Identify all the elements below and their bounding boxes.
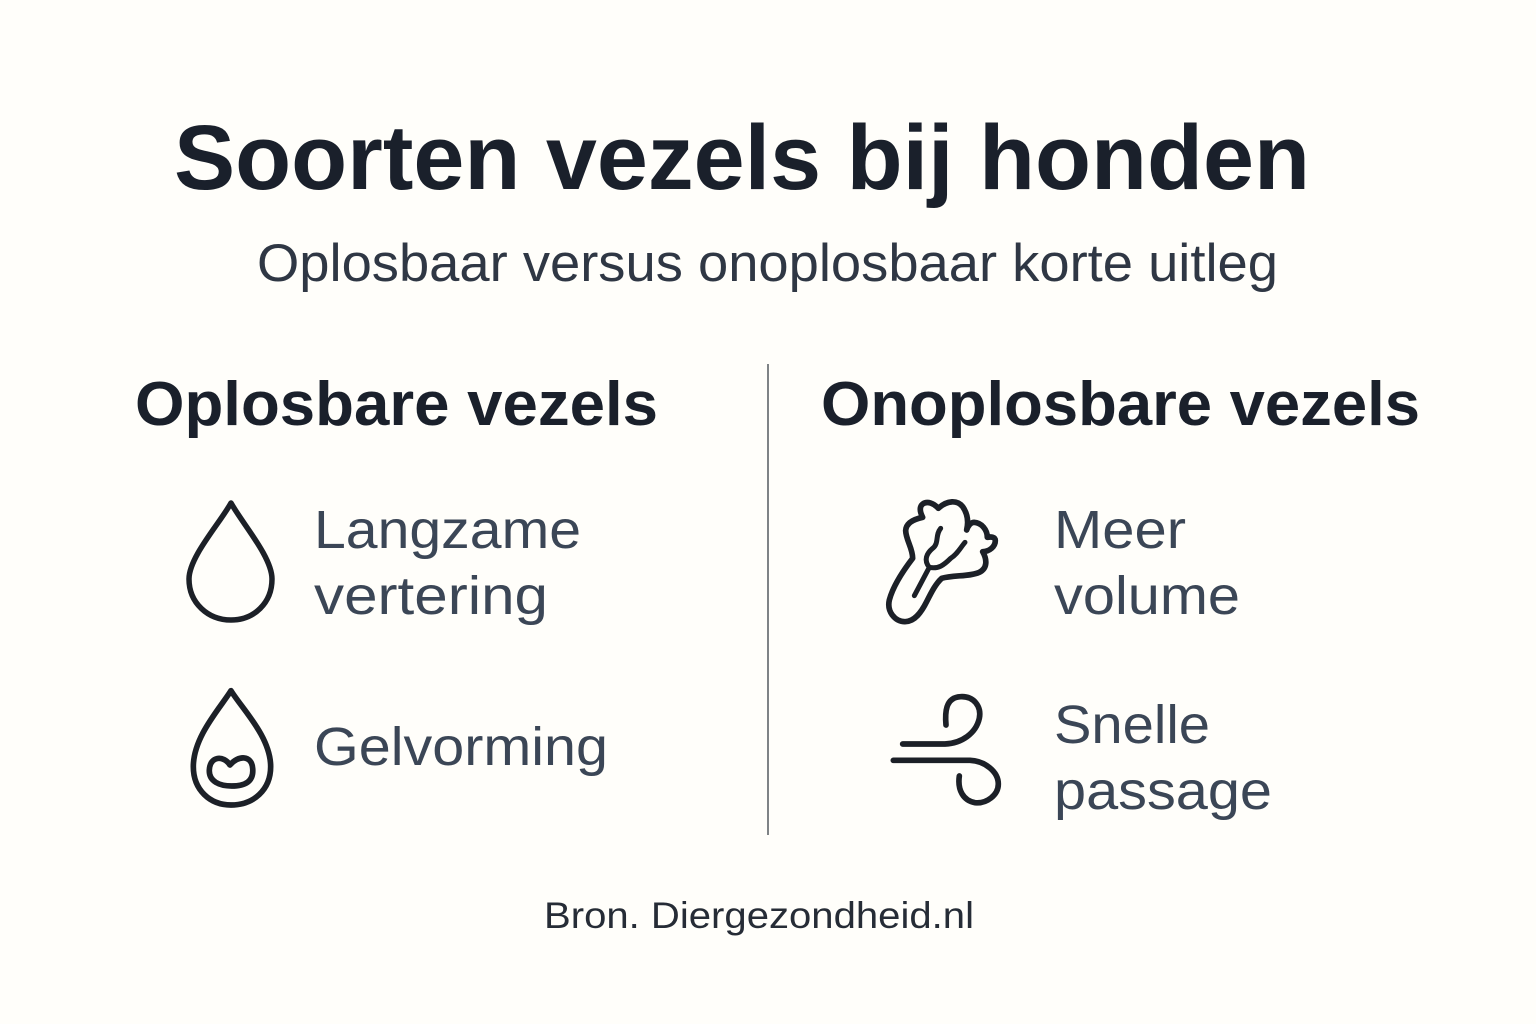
icon: water drop [189, 503, 272, 620]
text: meer volume [1054, 500, 1240, 626]
title: Soorten vezels bij honden [174, 107, 1310, 209]
text: snelle passage: Snelle [1054, 695, 1210, 755]
subtitle: Oplosbaar versus onoplosbaar korte uitleg [257, 234, 1278, 293]
heading: onoplosbare vezels: Onoplosbare vezels [821, 370, 1420, 439]
icon: drop with gel [193, 691, 271, 805]
heading: oplosbare vezels: Oplosbare vezels [135, 370, 658, 439]
icon: leafy vegetable [889, 502, 995, 622]
text: langzame vertering: vertering [314, 566, 548, 626]
text: langzame vertering [314, 500, 581, 626]
panel: oplosbare vezels [135, 370, 658, 805]
icon: wind [893, 697, 998, 803]
text: meer volume: Meer [1054, 500, 1186, 560]
text: meer volume: volume [1054, 566, 1240, 626]
center divider [767, 364, 769, 835]
text: gelvorming: Gelvorming [314, 717, 608, 777]
text: snelle passage: passage [1054, 761, 1272, 821]
source line: Bron. Diergezondheid.nl [544, 895, 974, 936]
text: snelle passage [1054, 695, 1272, 821]
panel: onoplosbare vezels [821, 370, 1420, 821]
text: langzame vertering: Langzame [314, 500, 581, 560]
